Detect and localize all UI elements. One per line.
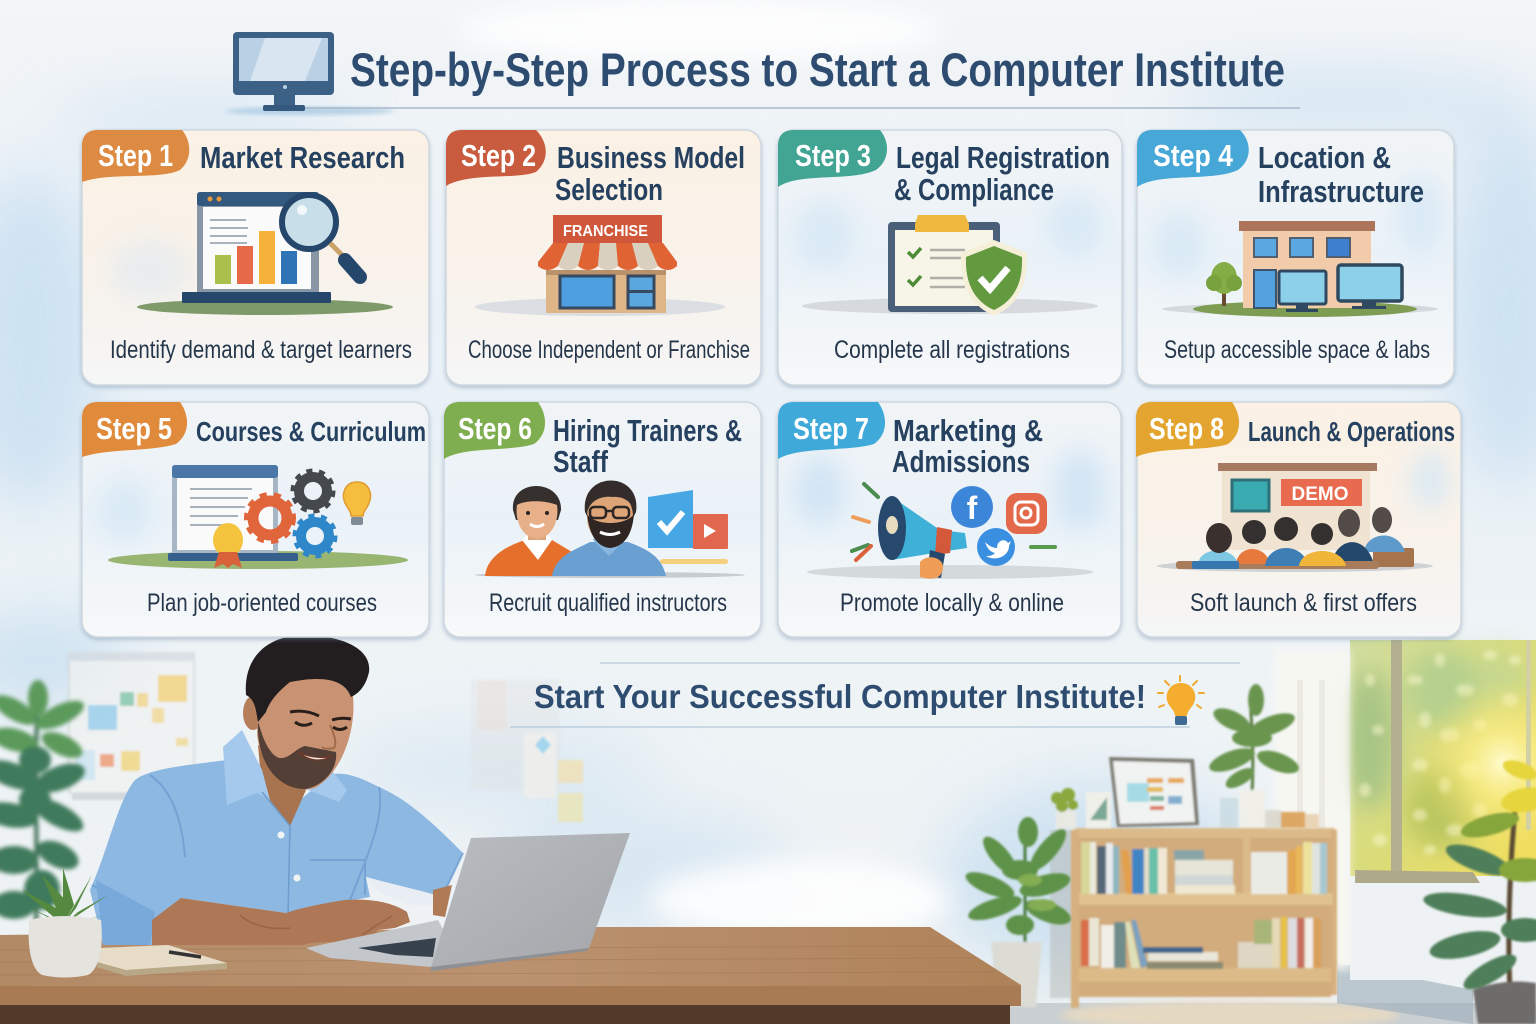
heading: Infrastructure <box>1258 174 1424 209</box>
heading <box>555 140 745 207</box>
desk plant and notebook <box>22 868 227 978</box>
heading: Location & <box>1258 140 1391 175</box>
icon: building and computers <box>1162 221 1438 317</box>
beard <box>258 722 336 789</box>
sleeve shading <box>92 775 463 918</box>
torso and shirt <box>90 760 463 945</box>
heading: Market Research <box>200 140 405 175</box>
smile <box>298 752 332 760</box>
description: Choose Independent or Franchise <box>468 336 750 364</box>
step 1 badge: Step 1 <box>98 138 173 173</box>
step 3 badge <box>778 130 887 187</box>
laptop <box>306 833 630 971</box>
heading <box>894 140 1110 207</box>
heading <box>1258 140 1424 209</box>
step 8 badge <box>1136 402 1239 457</box>
description: Soft launch & first offers <box>1190 589 1417 617</box>
step 4 badge: Step 4 <box>1153 138 1234 173</box>
window with sunlight <box>1275 640 1536 970</box>
desk <box>0 927 1021 1024</box>
icon: trainers and video <box>475 480 745 578</box>
panel: step 3 legal registration <box>778 130 1122 385</box>
right arm patch behind laptop <box>366 877 442 905</box>
right foreground plant <box>1422 756 1536 1024</box>
forearm and hand <box>152 898 410 945</box>
icon: clipboard and shield <box>802 215 1098 316</box>
hair <box>246 635 369 722</box>
heading: Admissions <box>892 444 1030 479</box>
panel: step 1 market research <box>82 130 429 385</box>
heading <box>553 413 742 479</box>
panel: step 7 marketing <box>778 402 1121 637</box>
floor and lower wall <box>1005 880 1536 1024</box>
step 8 badge: Step 8 <box>1149 411 1224 446</box>
step 6 badge: Step 6 <box>458 411 532 446</box>
step 2 badge <box>446 130 546 186</box>
description: Setup accessible space & labs <box>1164 336 1430 364</box>
ear <box>243 696 263 730</box>
description: Identify demand & target learners <box>110 336 412 364</box>
panel: step 2 business model <box>446 130 761 385</box>
heading: Selection <box>555 172 663 207</box>
picture frame and small plant on shelf <box>1051 757 1199 829</box>
heading: Legal Registration <box>896 140 1110 175</box>
nose <box>322 725 335 749</box>
desk plant <box>22 868 108 978</box>
bookshelf <box>1050 828 1337 1008</box>
step 1 badge <box>82 130 189 182</box>
buttons <box>278 832 300 882</box>
heading <box>892 413 1043 479</box>
icon: light bulb <box>1158 676 1204 725</box>
description: Plan job-oriented courses <box>147 589 377 617</box>
step 4 badge <box>1137 130 1249 187</box>
callout banner <box>510 663 1240 727</box>
description: Promote locally & online <box>840 589 1064 617</box>
neck <box>258 745 318 826</box>
panel: step 5 courses <box>82 402 429 637</box>
icon: demo classroom <box>1157 463 1433 572</box>
step 6 badge <box>444 402 545 459</box>
head <box>257 670 353 789</box>
icon: report and magnifier <box>137 192 393 315</box>
notebook <box>97 945 227 976</box>
man with laptop <box>90 635 463 945</box>
heading: & Compliance <box>894 172 1054 207</box>
step 5 badge <box>82 402 187 457</box>
floor plant by shelf <box>963 817 1074 1007</box>
heading: Hiring Trainers & <box>553 413 742 448</box>
step 7 badge: Step 7 <box>793 411 869 446</box>
pinboard on wall <box>69 653 583 822</box>
step 5 badge: Step 5 <box>96 411 172 446</box>
panel: step 6 hiring <box>444 402 761 637</box>
heading: Courses & Curriculum <box>196 416 426 447</box>
step 2 badge: Step 2 <box>461 138 536 173</box>
heading: Marketing & <box>893 413 1043 448</box>
icon: demo classroom: DEMO <box>1292 484 1348 505</box>
title: Step-by-Step Process to Start a Computer Institute <box>350 43 1285 96</box>
icon: curriculum and gears <box>108 465 408 569</box>
left wall plant <box>0 680 89 930</box>
icon: megaphone and social <box>807 484 1093 579</box>
callout text: Start Your Successful Computer Institute! <box>534 678 1146 715</box>
heading: Business Model <box>557 140 745 175</box>
panel: step 8 launch <box>1136 402 1461 637</box>
description: Complete all registrations <box>834 336 1070 364</box>
heading: Staff <box>553 444 609 479</box>
icon: franchise shop: FRANCHISE <box>563 223 648 240</box>
icon: franchise shop <box>475 215 725 316</box>
panel: step 4 location <box>1137 130 1454 385</box>
potted plant near window <box>1206 684 1319 828</box>
eyes and brows <box>290 711 351 730</box>
title icon: monitor <box>225 32 395 115</box>
collar <box>223 730 347 805</box>
step 7 badge <box>778 402 885 459</box>
heading: Launch & Operations <box>1248 416 1455 447</box>
icon: megaphone and social: f <box>967 490 978 526</box>
awning <box>538 243 677 270</box>
step 3 badge: Step 3 <box>795 138 871 173</box>
description: Recruit qualified instructors <box>489 589 727 617</box>
